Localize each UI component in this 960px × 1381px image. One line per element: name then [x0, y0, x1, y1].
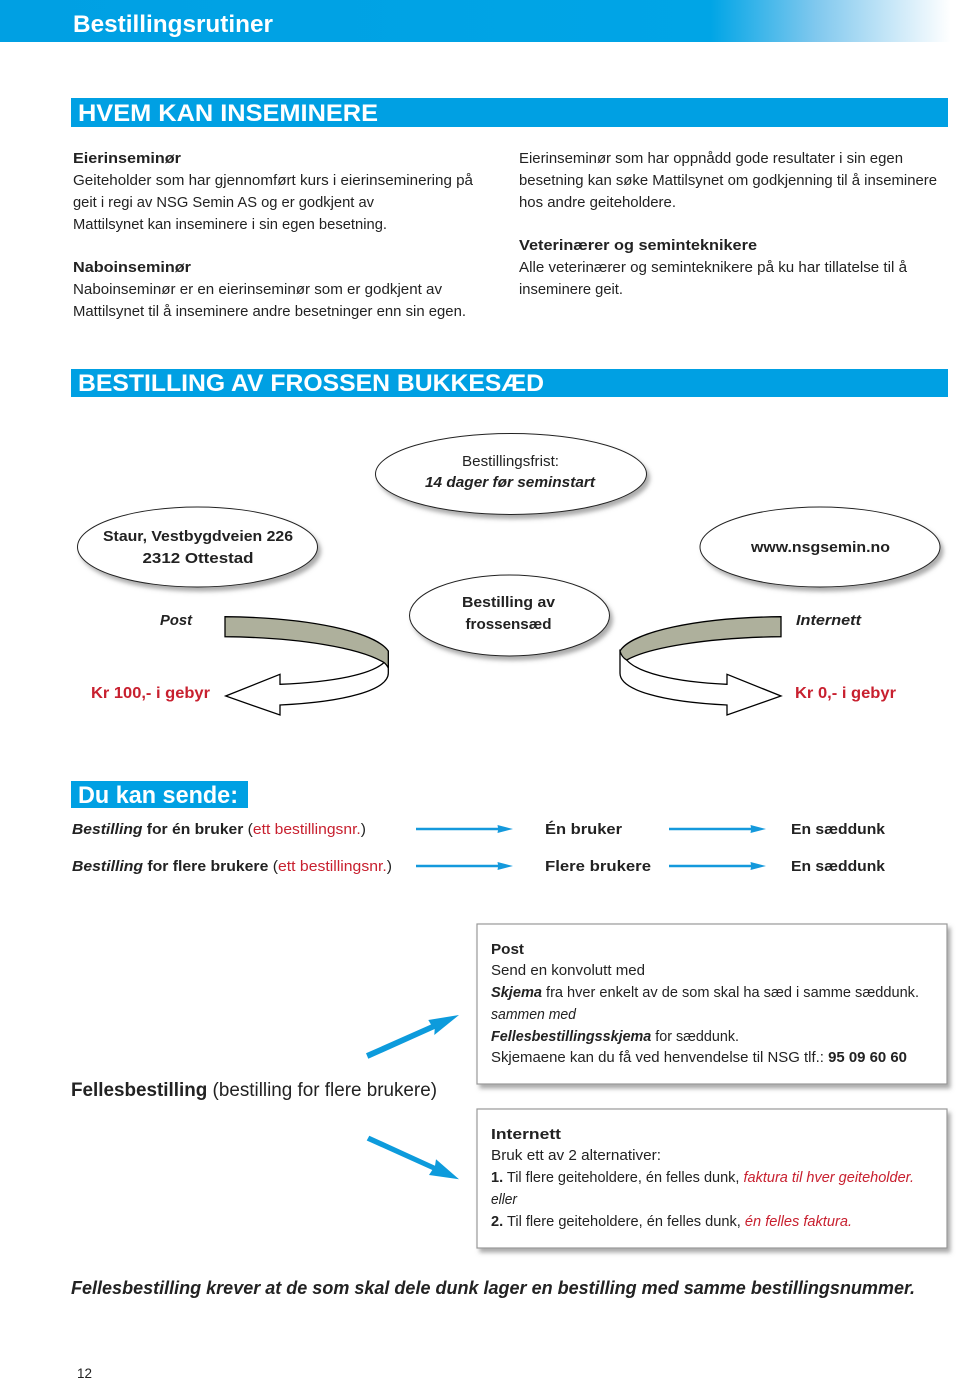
text block: right column: hos andre geiteholdere.	[519, 194, 676, 211]
ellipse: Post address: 2312 Ottestad	[142, 550, 254, 567]
ellipse: Post address: Staur, Vestbygdveien 226	[103, 528, 293, 545]
ellipse: Bestillingsfrist	[376, 434, 646, 514]
panel: Post: sammen med	[491, 1006, 577, 1023]
page header band: Bestillingsrutiner	[73, 11, 273, 38]
text block: right column: Veterinærer og seminteknikere	[519, 237, 757, 254]
page header band	[0, 0, 960, 42]
page number: 12	[77, 1365, 92, 1381]
text block: left column: Eierinseminør	[73, 150, 181, 167]
text block: left column: Mattilsynet kan inseminere i sin egen besetning.	[73, 216, 387, 233]
ellipse: Bestillingsfrist: 14 dager før seminstart	[425, 474, 596, 491]
text block: left column: Geiteholder som har gjennomført kurs i eierinseminering på	[73, 172, 474, 189]
panel: Post	[477, 924, 947, 1084]
text block: right column	[519, 150, 937, 298]
ellipse: Bestilling av frossensæd: frossensæd	[466, 616, 552, 633]
label: Kr 0 fee: Kr 0,- i gebyr	[795, 685, 896, 702]
row: several users: Flere brukere	[545, 858, 651, 875]
row: several users: En sæddunk	[791, 858, 886, 875]
panel: Internett: Internett	[491, 1126, 561, 1143]
panel: Internett	[477, 1109, 947, 1248]
panel: Post: Fellesbestillingsskjema for sæddunk.	[491, 1028, 739, 1045]
panel: Internett: 2. Til flere geiteholdere, én felles dunk, én felles faktura.	[491, 1213, 852, 1230]
ellipse: Bestilling av frossensæd: Bestilling av	[462, 594, 556, 611]
row: several users: Bestilling for flere brukere (ett bestillingsnr. )	[72, 858, 392, 875]
text block: left column: geit i regi av NSG Semin AS og er godkjent av	[73, 194, 374, 211]
label: Post: Post	[160, 612, 193, 629]
text block: right column: inseminere geit.	[519, 281, 623, 298]
panel: Internett: eller	[491, 1191, 518, 1208]
row: one user: Én bruker	[545, 821, 622, 838]
closing note: Fellesbestilling krever at de som skal dele dunk lager en bestilling med samme bestillingsnummer.	[71, 1278, 915, 1298]
panel: Internett: Bruk ett av 2 alternativer:	[491, 1147, 661, 1164]
arrow: up to Post box	[366, 1015, 459, 1059]
panel: Post: Send en konvolutt med	[491, 962, 645, 979]
row: one user: Bestilling for én bruker (ett bestillingsnr. )	[72, 821, 366, 838]
heading: BESTILLING AV FROSSEN BUKKESÆD	[71, 369, 948, 397]
label: Kr 100 fee: Kr 100,- i gebyr	[91, 685, 210, 702]
label: Fellesbestilling: Fellesbestilling (bestilling for flere brukere)	[71, 1080, 437, 1101]
text block: right column: besetning kan søke Mattilsynet om godkjenning til å inseminere	[519, 172, 937, 189]
ellipse: Bestilling av frossensæd	[410, 575, 610, 656]
ellipse: website: www.nsgsemin.no	[750, 539, 890, 556]
panel: Post: Post	[491, 941, 524, 958]
text block: left column: Naboinseminør er en eierinseminør som er godkjent av	[73, 281, 443, 298]
heading: Du kan sende: Du kan sende:	[78, 782, 238, 809]
heading: BESTILLING AV FROSSEN BUKKESÆD: BESTILLING AV FROSSEN BUKKESÆD	[78, 370, 544, 397]
text block: right column: Alle veterinærer og seminteknikere på ku har tillatelse til å	[519, 259, 908, 276]
heading: HVEM KAN INSEMINERE	[71, 98, 948, 127]
text block: left column: Mattilsynet til å inseminere andre besetninger enn sin egen.	[73, 303, 466, 320]
ellipse: website	[700, 507, 940, 587]
curved arrow: post	[225, 617, 388, 715]
ellipse: Bestillingsfrist: Bestillingsfrist:	[462, 453, 559, 470]
heading: HVEM KAN INSEMINERE: HVEM KAN INSEMINERE	[78, 100, 378, 127]
row: several users	[72, 858, 886, 875]
text block: right column: Eierinseminør som har oppnådd gode resultater i sin egen	[519, 150, 903, 167]
panel: Post: Skjemaene kan du få ved henvendelse til NSG tlf.: 95 09 60 60	[491, 1049, 907, 1066]
arrow: down to Internett box	[367, 1136, 459, 1179]
ellipse: Post address	[78, 507, 318, 587]
row: one user: En sæddunk	[791, 821, 886, 838]
row: one user	[72, 821, 886, 838]
text block: left column	[73, 150, 474, 320]
panel: Post: Skjema fra hver enkelt av de som skal ha sæd i samme sæddunk.	[491, 984, 919, 1001]
text block: left column: Naboinseminør	[73, 259, 191, 276]
label: Internett: Internett	[796, 612, 862, 629]
panel: Internett: 1. Til flere geiteholdere, én felles dunk, faktura til hver geiteholder.	[491, 1169, 914, 1186]
curved arrow: internett	[620, 617, 781, 715]
